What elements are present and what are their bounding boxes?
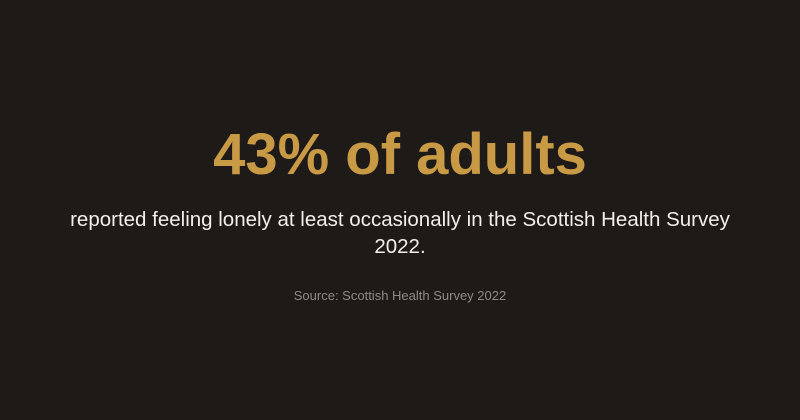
description text: reported feeling lonely at least occasionally in the Scottish Health Survey 2022. <box>70 208 730 258</box>
source note: Source: Scottish Health Survey 2022 <box>294 288 506 303</box>
headline stat: 43% of adults <box>213 122 587 187</box>
